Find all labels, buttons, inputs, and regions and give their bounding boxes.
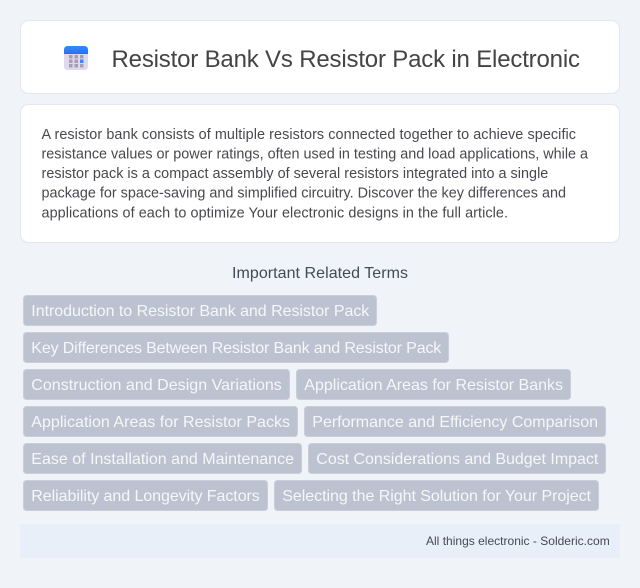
text block: description: resistance values or power ratings, often used in testing and load applications, while a [42,147,588,163]
text block: description: applications of each to optimize Your electronic designs in the full article. [42,205,508,221]
tag: Introduction to Resistor Bank and Resistor Pack [31,303,370,320]
text block: description: A resistor bank consists of multiple resistors connected together to achieve specific [42,127,576,143]
footer text: All things electronic - Solderic.com [426,534,610,548]
tag [24,296,376,326]
tag: Construction and Design Variations [31,377,282,394]
title: Resistor Bank Vs Resistor Pack in Electronic [112,46,580,73]
icon: calendar [64,46,88,70]
text block: description: resistor pack is a compact assembly of several resistors integrated into a single [42,166,548,182]
heading: related terms: Important Related Terms [232,265,408,282]
tag [308,444,606,474]
tag [24,444,302,474]
tag [274,480,598,510]
text block: description: package for space-saving and simplified circuitry. Discover the key differences and [42,186,566,202]
tag [24,480,268,510]
tag: Ease of Installation and Maintenance [31,451,294,468]
tag [296,370,570,400]
text block: description [42,127,588,221]
tag: Cost Considerations and Budget Impact [316,451,599,468]
tag list [24,296,606,510]
panel: description [20,104,620,242]
tag [24,370,290,400]
tag: Reliability and Longevity Factors [31,488,260,505]
tag: Performance and Efficiency Comparison [312,414,598,431]
tag: Application Areas for Resistor Banks [304,377,563,394]
footer [20,524,620,558]
tag [24,406,298,436]
tag: Application Areas for Resistor Packs [31,414,290,431]
panel: header [20,20,620,94]
tag [304,406,606,436]
tag [24,332,448,362]
tag: Selecting the Right Solution for Your Project [282,488,592,505]
tag: Key Differences Between Resistor Bank and Resistor Pack [31,340,442,357]
